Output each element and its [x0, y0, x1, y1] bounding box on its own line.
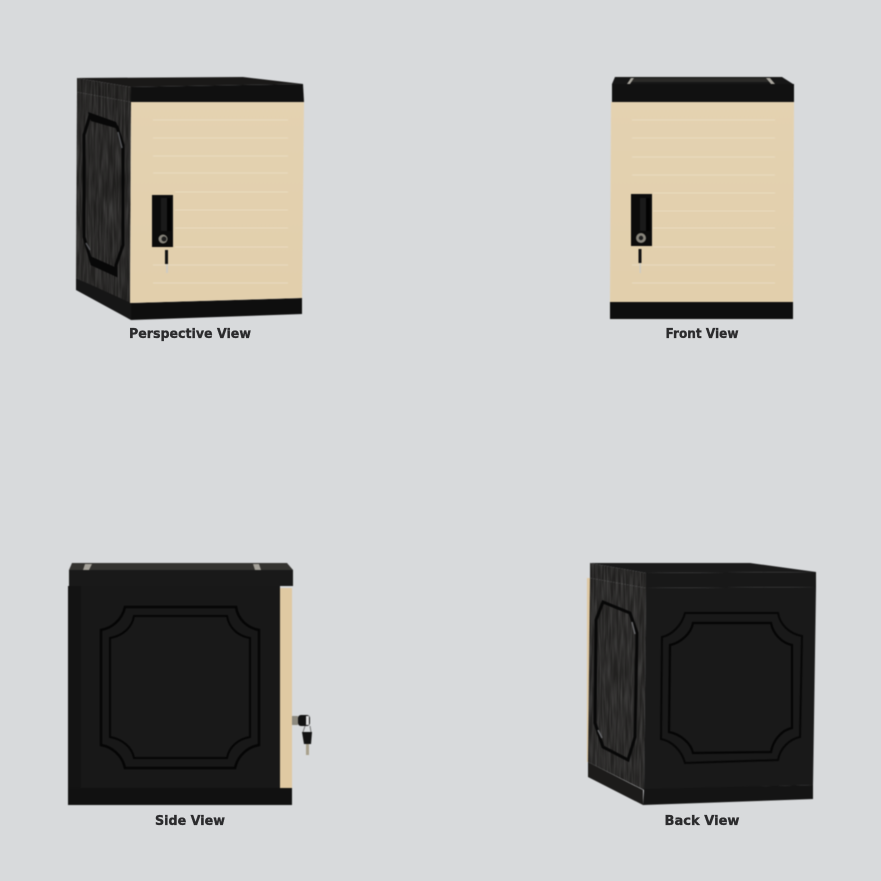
side panel moulding — [595, 602, 637, 760]
lock and keys — [292, 715, 312, 755]
lock handle — [631, 194, 652, 246]
outer moulding — [661, 613, 802, 763]
caption: Front View — [666, 327, 738, 342]
lock handle — [152, 195, 173, 247]
panel: back view — [587, 563, 816, 829]
locker: back — [587, 563, 816, 805]
locker: side — [68, 563, 312, 805]
caption: Perspective View — [129, 327, 251, 342]
panel: front view — [610, 77, 794, 342]
locker: perspective — [76, 77, 304, 320]
panel: side view — [68, 563, 312, 829]
caption: Side View — [155, 814, 225, 829]
panel: perspective view — [76, 77, 304, 342]
inner moulding — [110, 616, 250, 758]
key — [165, 250, 168, 273]
locker: front — [610, 77, 794, 319]
side panel moulding — [84, 112, 123, 276]
caption: Back View — [664, 814, 740, 829]
outer moulding — [101, 607, 259, 768]
key — [638, 249, 642, 273]
inner moulding — [669, 623, 792, 753]
